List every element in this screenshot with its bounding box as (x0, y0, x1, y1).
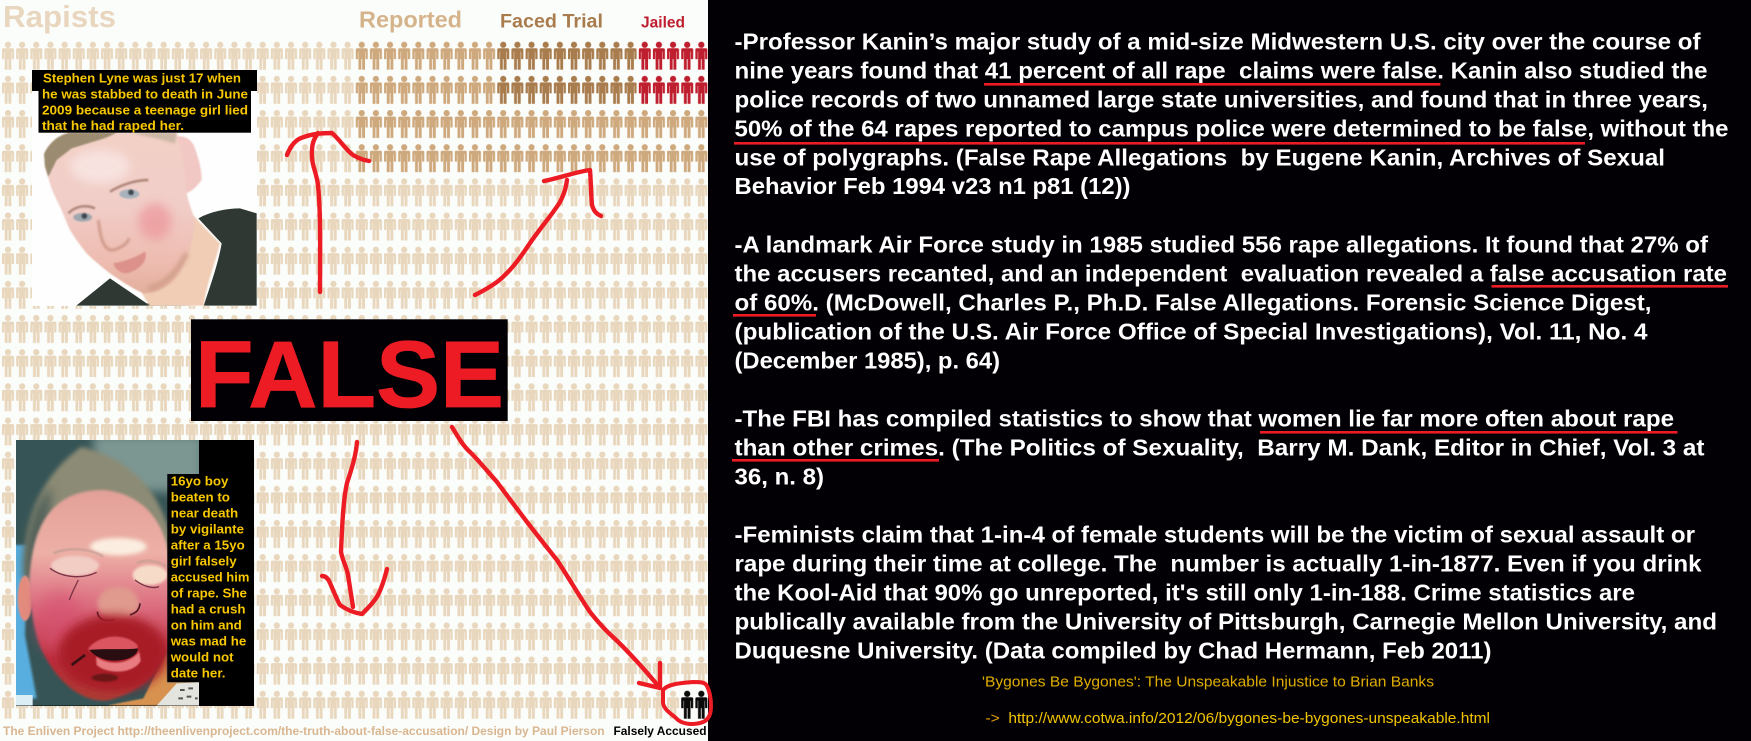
caption box: 16yo boy: date her. (171, 666, 226, 680)
people: jailed (639, 40, 708, 108)
link title: Bygones Be Bygones: 'Bygones Be Bygones': The Unspeakable Injustice to Brian Banks (982, 674, 1434, 690)
arrow: down to boy's row (322, 442, 387, 614)
people: faced trial (496, 40, 639, 108)
eye cuts and brows (50, 549, 167, 600)
face (45, 133, 195, 293)
pictogram chart: grid of people (0, 40, 708, 720)
caption box: 16yo boy: would not (170, 650, 234, 664)
panel: chart background (0, 0, 708, 741)
text block: campus claim: the Kool-Aid that 90% go unreported, it's still only 1-in-188. Crime statistics are (734, 580, 1635, 606)
people: falsely accused (680, 689, 708, 720)
caption box: Stephen Lyne: Stephen Lyne was just 17 when (43, 70, 241, 86)
text block: Kanin study: Behavior Feb 1994 v23 n1 p81 (12)) (734, 173, 1130, 199)
text block: campus claim (734, 522, 1717, 664)
text block: FBI statistics: than other crimes. (The Politics of Sexuality, Barry M. Dank, Editor in Chief, Vol. 3 at (734, 434, 1705, 460)
nose (98, 587, 139, 620)
text block: Kanin study: use of polygraphs. (False Rape Allegations by Eugene Kanin, Archives of Sexual (734, 144, 1665, 170)
text block: campus claim: -Feminists claim that 1-in-4 of female students will be the victim of sexual assault or (734, 522, 1695, 548)
caption box: 16yo boy: on him and (171, 618, 242, 632)
text block: campus claim: publically available from the University of Pittsburgh, Carnegie Mellon University, and (734, 608, 1717, 634)
caption box: Stephen Lyne: that he had raped her. (42, 118, 184, 133)
text block: Air Force study: the accusers recanted, and an independent evaluation revealed a false accusation rate (734, 260, 1727, 286)
underline: false accusation rate (1492, 285, 1728, 288)
heading: Faced Trial: Faced Trial (500, 10, 603, 32)
footer credit: The Enliven Project http://theenlivenproject.com/the-truth-about-false-accusation/ Design by Paul Pierson (3, 724, 605, 738)
caption box: 16yo boy: accused him (171, 570, 250, 584)
ear (177, 136, 202, 194)
people: reported (355, 40, 708, 176)
caption box: Stephen Lyne: he was stabbed to death in June (42, 86, 248, 102)
hair (25, 447, 170, 582)
text block: Kanin study: 50% of the 64 rapes reported to campus police were determined to be false, without the (734, 116, 1728, 142)
ear (18, 576, 32, 621)
heading: Jailed: Jailed (641, 14, 685, 32)
circle around falsely accused icons (663, 682, 711, 724)
text block: Air Force study: of 60%. (McDowell, Charles P., Ph.D. False Allegations. Forensic Science Digest, (734, 290, 1652, 316)
callout: FALSE: FALSE (195, 322, 504, 428)
text block: Air Force study: -A landmark Air Force study in 1985 studied 556 rape allegations. It found that 27% of (734, 232, 1708, 258)
shirt (75, 208, 257, 307)
arrow: down to falsely accused (452, 427, 660, 688)
face (29, 490, 170, 701)
caption box: Stephen Lyne (32, 70, 257, 133)
forehead light (70, 150, 130, 183)
panel: Stephen Lyne photo card (32, 70, 257, 307)
text block: FBI statistics: -The FBI has compiled statistics to show that women lie far more often about rape (734, 406, 1674, 432)
eyelids (51, 556, 99, 576)
caption box: 16yo boy: girl falsely (171, 554, 237, 568)
text block: Kanin study (734, 28, 1728, 199)
neck (140, 210, 220, 307)
link URL: -> http://www.cotwa.info/2012/06/bygones-be-bygones-unspeakable.html (986, 711, 1490, 727)
face shadow (148, 253, 187, 288)
underline: than other crimes (732, 459, 939, 462)
photo: injured boy's face (13, 435, 203, 706)
lips (113, 252, 146, 273)
photo: portrait of Stephen Lyne (44, 133, 257, 307)
text block: Kanin study: -Professor Kanin’s major study of a mid-size Midwestern U.S. city over the course of (734, 28, 1701, 54)
pink left cheek (37, 592, 83, 652)
legend label: Falsely Accused: Falsely Accused (614, 724, 706, 738)
caption box: 16yo boy: 16yo boy (171, 474, 229, 488)
text block: Air Force study (733, 232, 1728, 374)
caption box: 16yo boy (167, 474, 250, 682)
caption box: 16yo boy: had a crush (171, 602, 246, 616)
eyes and brows (68, 180, 148, 222)
caption box: 16yo boy: after a 15yo (171, 538, 245, 552)
text block: Kanin study: nine years found that 41 percent of all rape claims were false. Kanin also studied the (734, 58, 1708, 84)
underline: 50% of the 64 rapes (734, 142, 1585, 145)
title: Rapists: Rapists (3, 0, 116, 34)
caption box: 16yo boy: beaten to (171, 490, 230, 504)
people: all rapists (0, 40, 708, 720)
cheek flush (138, 203, 172, 240)
neck and gown (107, 652, 199, 706)
nose (98, 220, 129, 250)
text block: Air Force study: (publication of the U.S. Air Force Office of Special Investigations), Vol. 11, No. 4 (734, 318, 1648, 344)
text block: Kanin study: police records of two unnamed large state universities, and found that in three years, (734, 86, 1708, 112)
caption box: Stephen Lyne: 2009 because a teenage girl lied (42, 102, 248, 118)
caption box: 16yo boy: was mad he (170, 634, 246, 648)
hair (44, 133, 117, 177)
text block: FBI statistics (732, 406, 1705, 490)
panel: beaten boy photo card (13, 435, 254, 706)
text block: FBI statistics: 36, n. 8) (734, 464, 824, 490)
arrow: up to reported (475, 170, 601, 295)
caption box: 16yo boy: by vigilante (171, 522, 244, 536)
text block: Air Force study: (December 1985), p. 64) (734, 348, 1000, 374)
forehead highlight (90, 538, 147, 555)
underline: women lie (1260, 431, 1678, 434)
underline: of 60% (733, 314, 816, 317)
caption box: 16yo boy: near death (171, 506, 238, 520)
text block: campus claim: Duquesne University. (Data compiled by Chad Hermann, Feb 2011) (734, 638, 1492, 664)
heading: Reported: Reported (359, 6, 462, 32)
mouth (72, 637, 141, 682)
panel: black text background (708, 0, 1751, 741)
blood around mouth (58, 615, 168, 692)
underline: 41 percent (984, 83, 1440, 86)
caption box: 16yo boy: of rape. She (171, 586, 247, 600)
text block: campus claim: rape during their time at college. The number is actually 1-in-1877. Even if you drink (734, 550, 1702, 576)
arrow: up to Stephen Lyne (287, 133, 369, 292)
